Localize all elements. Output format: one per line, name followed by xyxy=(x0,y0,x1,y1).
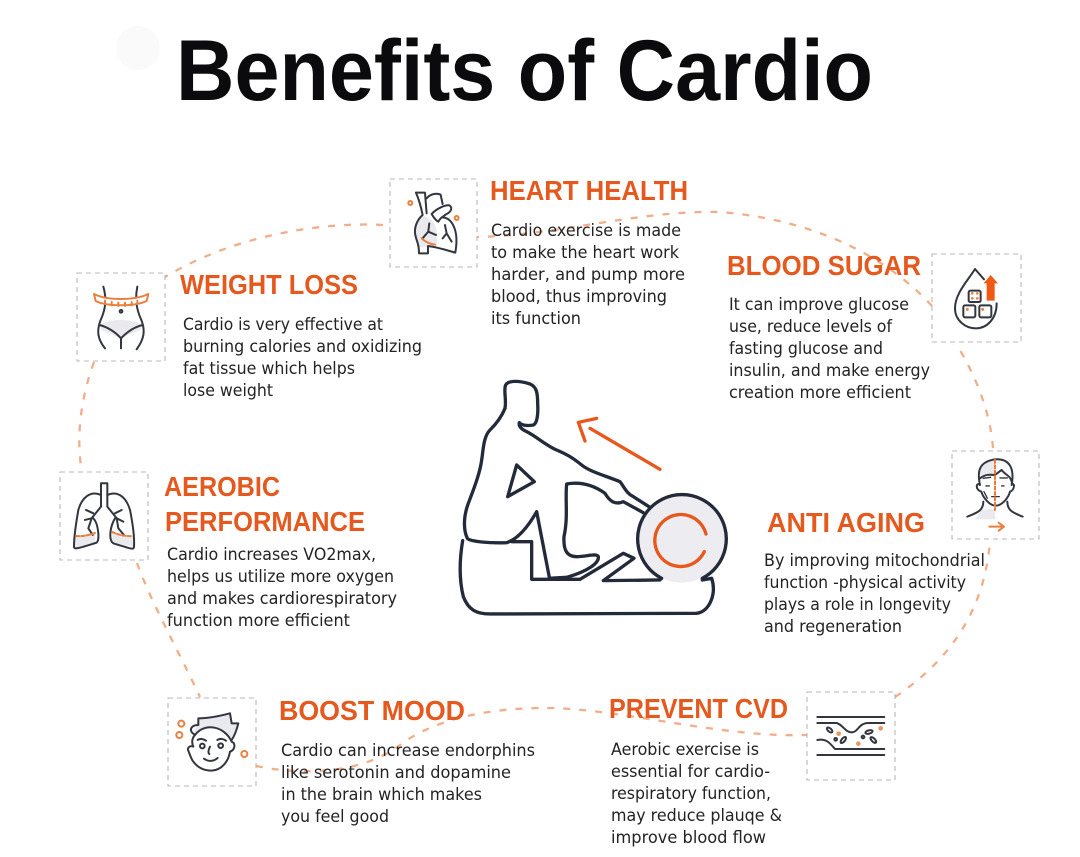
text: blood sugar: It can improve glucose xyxy=(729,295,909,314)
text: heart health: Cardio exercise is made xyxy=(491,221,681,240)
text: boost mood: you feel good xyxy=(281,807,389,826)
text: aerobic performance xyxy=(167,545,397,630)
flywheel mark xyxy=(655,515,706,567)
text: weight loss: lose weight xyxy=(183,381,273,400)
icon: artery with plaque xyxy=(807,692,895,780)
text: boost mood: Cardio can increase endorphins xyxy=(281,741,535,760)
icon: smiling face xyxy=(168,698,256,786)
panel: heart health xyxy=(390,175,688,328)
text: boost mood: like serotonin and dopamine xyxy=(281,763,511,782)
text: blood sugar: fasting glucose and xyxy=(729,339,883,358)
text: heart health: to make the heart work xyxy=(491,243,679,262)
heading: aerobic performance: AEROBIC xyxy=(164,471,280,502)
flywheel xyxy=(637,494,726,583)
text: blood sugar: use, reduce levels of xyxy=(729,317,893,336)
text: prevent cvd xyxy=(611,740,782,847)
title: Benefits of Cardio xyxy=(176,23,873,119)
text: blood sugar xyxy=(729,295,930,402)
heading: heart health: HEART HEALTH xyxy=(490,175,688,206)
panel: prevent cvd xyxy=(609,692,895,847)
text: weight loss xyxy=(183,315,422,400)
text: weight loss: burning calories and oxidizing xyxy=(183,337,422,356)
dashed ring connecting the benefits xyxy=(79,212,993,771)
text: weight loss: Cardio is very effective at xyxy=(183,315,383,334)
text: prevent cvd: respiratory function, xyxy=(611,784,771,803)
text: aerobic performance: function more efficient xyxy=(167,611,351,630)
text: anti aging xyxy=(764,551,985,636)
text: weight loss: fat tissue which helps xyxy=(183,359,355,378)
rowing machine base xyxy=(460,541,713,614)
heading: boost mood: BOOST MOOD xyxy=(279,695,465,726)
text: heart health xyxy=(491,221,685,328)
text: heart health: harder, and pump more xyxy=(491,265,685,284)
icon: heart xyxy=(390,179,477,267)
icon: waist with tape measure xyxy=(77,273,165,361)
icon: blood drop with sugar cubes xyxy=(932,254,1021,342)
text: anti aging: function -physical activity xyxy=(764,573,966,592)
text: prevent cvd: improve blood flow xyxy=(611,828,766,847)
text: aerobic performance: Cardio increases VO2max, xyxy=(167,545,376,564)
text: blood sugar: creation more efficient xyxy=(729,383,912,402)
text: boost mood: in the brain which makes xyxy=(281,785,482,804)
heading: prevent cvd: PREVENT CVD xyxy=(609,693,788,724)
icon: ageing face xyxy=(952,451,1039,539)
icon: lungs xyxy=(60,472,148,560)
text: heart health: blood, thus improving xyxy=(491,287,667,306)
heading: aerobic performance: PERFORMANCE xyxy=(165,506,365,537)
panel: boost mood xyxy=(168,695,535,826)
panel: blood sugar xyxy=(727,250,1021,402)
text: blood sugar: insulin, and make energy xyxy=(729,361,930,380)
person outline xyxy=(505,381,650,507)
text: boost mood xyxy=(281,741,535,826)
text: prevent cvd: Aerobic exercise is xyxy=(611,740,759,759)
arrow: pull direction xyxy=(578,418,660,469)
heading: aerobic performance xyxy=(164,471,365,537)
panel: anti aging xyxy=(764,451,1039,636)
text: anti aging: and regeneration xyxy=(764,617,902,636)
text: aerobic performance: helps us utilize more oxygen xyxy=(167,567,394,586)
text: heart health: its function xyxy=(491,309,581,328)
text: prevent cvd: may reduce plauqe & xyxy=(611,806,782,825)
heading: anti aging: ANTI AGING xyxy=(767,507,925,538)
heading: weight loss: WEIGHT LOSS xyxy=(180,269,358,300)
panel: weight loss xyxy=(77,269,422,400)
text: anti aging: By improving mitochondrial xyxy=(764,551,985,570)
text: prevent cvd: essential for cardio- xyxy=(611,762,770,781)
panel: aerobic performance xyxy=(60,471,397,630)
heading: blood sugar: BLOOD SUGAR xyxy=(727,250,921,281)
text: aerobic performance: and makes cardiorespiratory xyxy=(167,589,397,608)
central illustration: person on rowing machine xyxy=(460,381,726,614)
text: anti aging: plays a role in longevity xyxy=(764,595,951,614)
